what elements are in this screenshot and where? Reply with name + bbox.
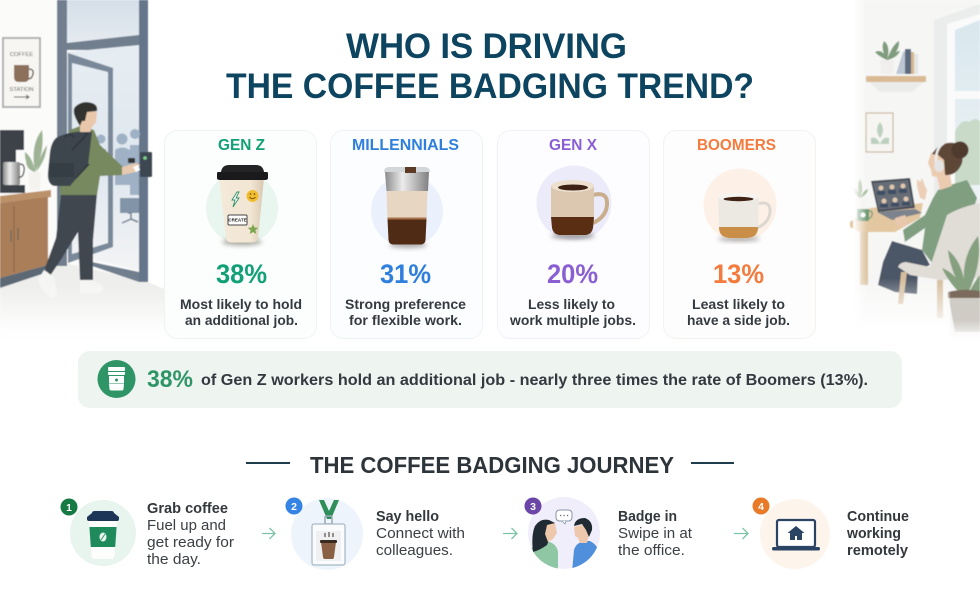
bottom fade	[0, 285, 170, 347]
step text: working	[846, 525, 901, 542]
step text: Grab coffee	[147, 500, 228, 517]
description	[345, 296, 466, 328]
description: Most likely to hold	[180, 296, 302, 312]
icon: steel tumbler	[371, 167, 443, 248]
stat: 13%	[713, 259, 764, 289]
coffee station poster: COFFEE	[10, 52, 33, 58]
badge number 1: 1	[66, 502, 72, 514]
people in the office behind the glass	[96, 129, 140, 223]
icon: lanyard badge	[291, 498, 363, 570]
icon: ceramic mug	[536, 166, 612, 240]
door frame and glass	[57, 0, 148, 282]
wooden cabinet	[0, 190, 51, 288]
panel: Gen X	[498, 130, 650, 338]
badge number 4: 4	[758, 501, 764, 513]
description: for flexible work.	[349, 312, 462, 328]
trousers	[45, 194, 97, 280]
description	[687, 296, 790, 328]
shoes	[38, 270, 57, 298]
step 2: say hello	[286, 498, 465, 570]
hand, phone, badge	[122, 163, 140, 175]
chair	[898, 203, 980, 318]
description: Less likely to	[528, 296, 615, 312]
description	[509, 296, 636, 328]
icon: laptop with home	[760, 499, 830, 569]
title: WHO IS DRIVING	[346, 27, 627, 66]
panel: Boomers	[664, 130, 816, 338]
window	[934, 4, 980, 215]
arrow	[262, 528, 275, 539]
illustration: employee badging in at the office door	[0, 0, 170, 347]
badge number 3	[524, 498, 542, 514]
badge number 2	[286, 498, 302, 514]
person with backpack	[38, 102, 140, 298]
floor plant	[942, 236, 980, 332]
heading: journey: THE COFFEE BADGING JOURNEY	[310, 452, 674, 478]
step 4: continue working remotely	[752, 498, 909, 569]
step text: Continue	[847, 508, 909, 525]
arrow	[734, 528, 748, 539]
icon: takeaway cup with stickers	[206, 165, 278, 246]
step text	[846, 508, 909, 559]
stat: 38%	[147, 366, 193, 393]
description: have a side job.	[687, 312, 790, 328]
panel: Millennials	[330, 130, 482, 338]
step 3: badge in	[524, 497, 693, 572]
desk	[850, 203, 923, 285]
title	[226, 27, 754, 106]
step text: Say hello	[376, 508, 439, 525]
badge reader	[140, 152, 152, 177]
step text: colleagues.	[376, 542, 453, 559]
stat: 20%	[547, 259, 598, 289]
step text: Fuel up and	[147, 517, 226, 534]
step 1: grab coffee	[60, 498, 234, 568]
step text	[376, 508, 465, 559]
step text: the day.	[147, 551, 201, 568]
fades	[853, 0, 867, 345]
heading: Boomers: BOOMERS	[697, 137, 776, 154]
step text: Connect with	[376, 525, 465, 542]
coffee station poster	[3, 38, 40, 107]
icon: takeaway cup with stickers: CREATE	[228, 218, 247, 222]
icon: two colleagues talking	[528, 497, 600, 572]
callout text: of Gen Z workers hold an additional job - nearly three times the rate of Boomers (13%).	[201, 372, 868, 389]
laptop with video call	[871, 178, 922, 220]
description: work multiple jobs.	[509, 312, 636, 328]
step text: the office.	[618, 542, 685, 559]
stat: 31%	[380, 259, 431, 289]
step text	[618, 508, 693, 559]
woman with headset on a call	[878, 142, 977, 294]
coffee machine	[0, 130, 25, 193]
heading: Gen X: GEN X	[549, 137, 597, 154]
icon: white mug	[704, 168, 776, 242]
callout: Gen Z statistic banner	[78, 351, 902, 408]
heading: Millennials: MILLENNIALS	[352, 137, 459, 154]
description: Least likely to	[692, 296, 785, 312]
open door panel	[68, 53, 113, 263]
icon: cup in green circle	[98, 360, 136, 398]
badge number 3: 3	[530, 501, 536, 513]
illustration: woman working remotely at home	[845, 0, 980, 346]
description	[180, 296, 302, 328]
step text	[147, 500, 234, 568]
description: Strong preference	[345, 296, 466, 312]
heading: Gen Z: GEN Z	[218, 137, 265, 154]
badge number 1	[60, 498, 78, 516]
step text: Badge in	[618, 508, 677, 525]
arrow	[503, 528, 517, 539]
coffee station poster: STATION	[9, 87, 34, 93]
framed picture	[866, 113, 893, 152]
step text: Swipe in at	[618, 525, 693, 542]
badge number 2: 2	[291, 501, 297, 513]
badge number 4	[752, 498, 770, 514]
backpack	[48, 132, 92, 186]
panel: Gen Z	[164, 130, 316, 338]
title: THE COFFEE BADGING TREND?	[226, 67, 754, 106]
small plant and mug	[853, 179, 872, 221]
description: an additional job.	[185, 312, 298, 328]
stat: 38%	[216, 259, 267, 289]
shelf with plant and books	[866, 41, 926, 92]
plant on the counter	[25, 130, 47, 190]
head	[80, 110, 97, 132]
step text: remotely	[847, 542, 909, 559]
step text: get ready for	[147, 534, 234, 551]
icon: green coffee cup	[70, 500, 136, 566]
jumper body and arm	[60, 126, 123, 195]
